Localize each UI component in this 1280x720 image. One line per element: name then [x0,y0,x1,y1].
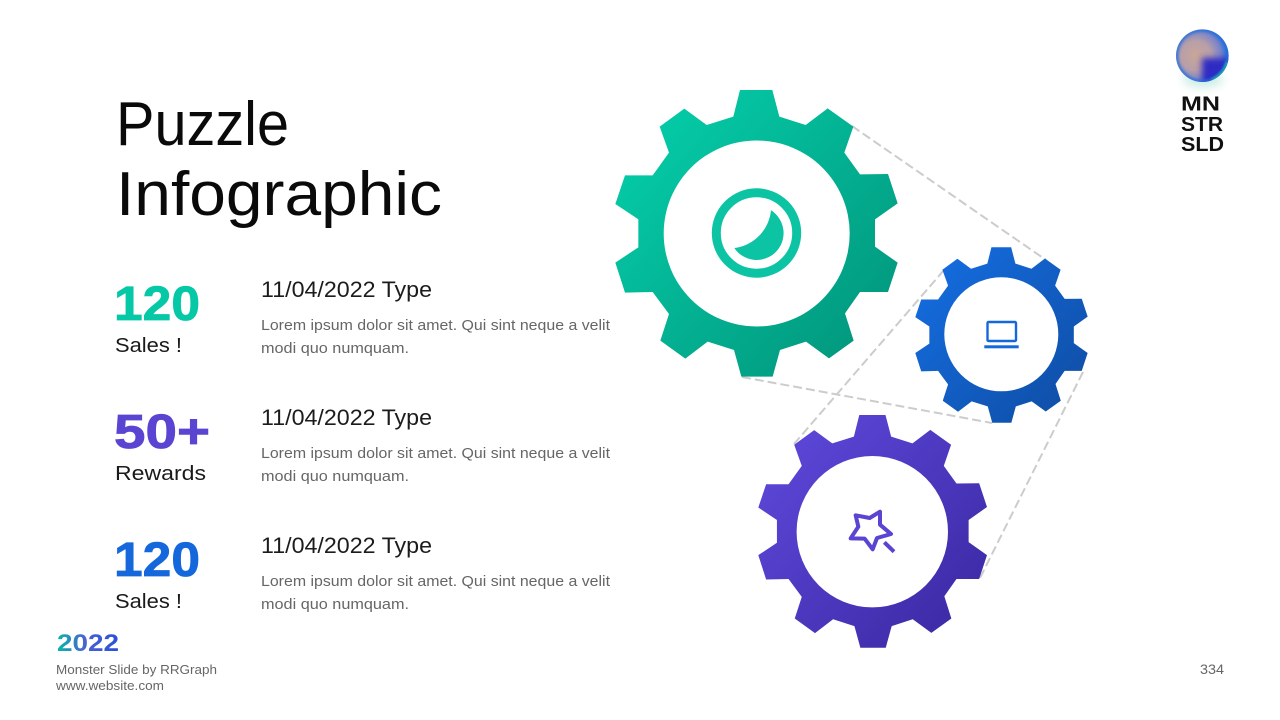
logo: wordmark [1181,94,1224,156]
logo: wordmark: STR [1181,114,1224,136]
dashed connector lines [742,126,1083,578]
title [116,90,442,229]
text block 3: 11/04/2022 Type [261,533,432,558]
stat: 120 sales: Sales ! [115,335,182,357]
icon: moon in ring [716,193,797,273]
title: Puzzle [116,90,289,159]
text block 1: Lorem ipsum dolor sit amet. Qui sint neque a velit [261,317,611,334]
stat row 2 [114,405,611,485]
text block 2: Lorem ipsum dolor sit amet. Qui sint neque a velit [261,445,611,462]
gear: blue [915,247,1088,423]
footer: credits: www.website.com [55,678,164,693]
logo: wordmark: SLD [1181,134,1224,156]
stat: 50+ rewards: Rewards [115,463,206,485]
stat row 3 [114,533,611,613]
text block 2: 11/04/2022 Type [261,405,432,430]
stat: 120 sales blue [114,534,200,613]
stat: 120 sales blue: 120 [114,534,200,587]
footer: credits: Monster Slide by RRGraph [56,662,217,677]
gear: purple [758,415,987,648]
icon: laptop [984,322,1019,348]
title: Infographic [116,160,442,229]
text block 2 [261,405,611,485]
stat: 120 sales blue: Sales ! [115,591,182,613]
stat: 120 sales: 120 [114,278,200,331]
stat: 50+ rewards: 50+ [114,406,210,459]
page number: 334 [1200,661,1224,677]
footer: credits [55,662,217,693]
text block 1 [261,277,611,357]
text block 1: modi quo numquam. [261,340,409,357]
text block 3 [261,533,611,613]
logo: wordmark: MN [1181,94,1220,116]
text block 2: modi quo numquam. [261,468,409,485]
text block 3: modi quo numquam. [261,596,409,613]
stat: 50+ rewards [114,406,210,485]
stat: 120 sales [114,278,200,357]
logo: sphere [1176,29,1236,88]
gear: green [615,90,898,377]
footer: year: 2022 [57,630,119,657]
stat row 1 [114,277,611,357]
icon: magic wand star [851,512,894,552]
text block 3: Lorem ipsum dolor sit amet. Qui sint neque a velit [261,573,611,590]
text block 1: 11/04/2022 Type [261,277,432,302]
